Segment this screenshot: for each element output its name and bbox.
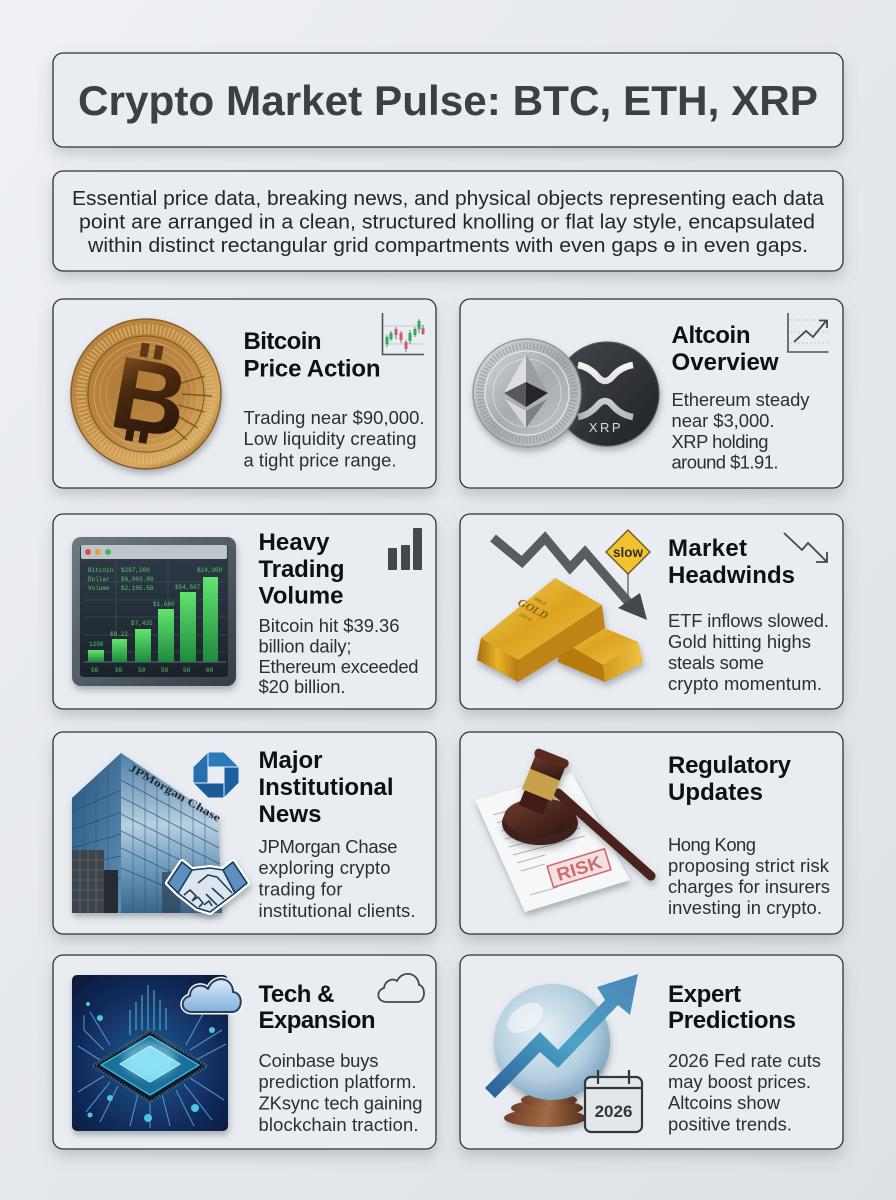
icon: trading monitor: 50 bbox=[161, 667, 169, 674]
icon: slow sign: slow bbox=[613, 545, 643, 560]
body text: proposing strict risk bbox=[668, 855, 830, 876]
icon: bars bbox=[388, 528, 422, 570]
panel: Regulatory Updates bbox=[460, 732, 843, 934]
body text: near $3,000. bbox=[672, 410, 774, 431]
panel: Altcoin Overview bbox=[460, 299, 843, 488]
heading: Trading bbox=[258, 556, 344, 583]
body text: Ethereum steady bbox=[672, 389, 810, 410]
heading: Price Action bbox=[244, 356, 380, 382]
icon: trading monitor: 50 bbox=[91, 667, 99, 674]
arrow: falling trend bbox=[493, 538, 647, 620]
icon: rising line chart bbox=[788, 313, 828, 352]
icon: candlestick chart bbox=[382, 313, 424, 354]
icon: document bbox=[475, 773, 630, 912]
icon: trading monitor: 1200 bbox=[89, 641, 104, 648]
heading bbox=[668, 981, 796, 1034]
stamp: RISK: RISK bbox=[554, 852, 604, 885]
body text: Ethereum exceeded bbox=[258, 656, 418, 677]
heading: Tech & bbox=[258, 981, 334, 1008]
icon: trading monitor: $1,680 bbox=[153, 601, 175, 608]
icon: crystal ball bbox=[494, 984, 610, 1127]
icon: bitcoin coin bbox=[71, 319, 221, 469]
icon: trading monitor: $2,105.50 bbox=[121, 585, 154, 592]
body text: around $1.91. bbox=[672, 452, 778, 472]
body text: Altcoins show bbox=[668, 1092, 781, 1113]
arrow: rising trend bbox=[485, 974, 638, 1098]
icon: JPMorgan building: JPMorgan Chase bbox=[126, 762, 223, 825]
body text: a tight price range. bbox=[244, 450, 396, 470]
heading: Updates bbox=[668, 779, 763, 806]
heading bbox=[258, 981, 376, 1034]
icon: falling line bbox=[784, 533, 827, 562]
body text: charges for insurers bbox=[668, 876, 830, 897]
body text: steals some bbox=[668, 652, 764, 673]
body text: Bitcoin hit $39.36 bbox=[258, 615, 400, 636]
stamp: RISK bbox=[547, 849, 611, 887]
icon: Chase logo bbox=[193, 752, 239, 798]
body text: Trading near $90,000. bbox=[244, 407, 424, 428]
heading: Market bbox=[668, 535, 747, 562]
icon: circuit chip image bbox=[72, 975, 228, 1131]
icon: trading monitor: 50 bbox=[115, 667, 123, 674]
panel: Heavy Trading Volume bbox=[53, 514, 436, 709]
intro text: within distinct rectangular grid compartments with even gaps ө in even gaps. bbox=[87, 234, 808, 257]
heading: Major bbox=[258, 747, 322, 774]
heading: Heavy bbox=[258, 529, 330, 556]
heading: Headwinds bbox=[668, 562, 795, 589]
body text: Gold hitting highs bbox=[668, 631, 811, 652]
body text: positive trends. bbox=[668, 1114, 792, 1134]
body text: Low liquidity creating bbox=[244, 428, 416, 449]
body text: Coinbase buys bbox=[258, 1050, 378, 1071]
icon: gold bars: 100 G bbox=[517, 612, 533, 623]
heading: Expansion bbox=[258, 1007, 376, 1034]
panel: Expert Predictions bbox=[460, 955, 843, 1149]
intro text: Essential price data, breaking news, and physical objects representing each data bbox=[72, 187, 825, 210]
body text: XRP holding bbox=[672, 431, 768, 452]
body text: JPMorgan Chase bbox=[258, 836, 398, 857]
heading: Altcoin bbox=[672, 322, 750, 349]
heading: Volume bbox=[258, 582, 344, 610]
heading: Institutional bbox=[258, 774, 394, 801]
panel: Tech & Expansion bbox=[53, 955, 436, 1149]
body text: ETF inflows slowed. bbox=[668, 610, 829, 631]
panel: Bitcoin Price Action bbox=[53, 299, 436, 488]
heading bbox=[244, 328, 380, 382]
icon: 2026 calendar: 2026 bbox=[595, 1102, 632, 1121]
icon: cloud outline bbox=[378, 974, 424, 1002]
intro text bbox=[72, 187, 825, 257]
panel: Major Institutional News bbox=[53, 732, 436, 934]
body text: investing in crypto. bbox=[668, 897, 822, 918]
icon: trading monitor: $24,300 bbox=[197, 567, 223, 574]
heading bbox=[258, 529, 344, 610]
body text: billion daily; bbox=[258, 636, 352, 656]
icon: trading monitor: 50 bbox=[183, 667, 191, 674]
heading: Predictions bbox=[668, 1007, 796, 1034]
body text bbox=[668, 610, 829, 694]
heading: Regulatory bbox=[668, 752, 792, 779]
icon: trading monitor: $6,003.80 bbox=[121, 576, 154, 583]
icon: trading monitor: Dollar bbox=[88, 576, 110, 583]
heading bbox=[672, 322, 779, 376]
icon: blue cloud bbox=[183, 979, 241, 1012]
icon: trading monitor: 60 bbox=[206, 667, 214, 674]
icon: gold bars: GOLD bbox=[514, 597, 551, 621]
icon: bitcoin coin: B bbox=[103, 334, 196, 460]
body text: trading for bbox=[258, 878, 342, 900]
body text bbox=[672, 389, 810, 472]
icon: gold bars bbox=[477, 578, 643, 682]
body text bbox=[668, 834, 830, 918]
heading: Expert bbox=[668, 981, 741, 1008]
intro text: point are arranged in a clean, structured knolling or flat lay style, encapsulated bbox=[79, 210, 815, 234]
body text: exploring crypto bbox=[258, 857, 390, 878]
icon: XRP coin bbox=[555, 342, 659, 446]
icon: gavel bbox=[502, 747, 651, 876]
body text: prediction platform. bbox=[258, 1071, 416, 1092]
heading: Bitcoin bbox=[244, 328, 322, 355]
icon: 2026 calendar bbox=[585, 1070, 642, 1132]
body text: crypto momentum. bbox=[668, 673, 822, 694]
title panel bbox=[53, 53, 843, 147]
body text bbox=[668, 1050, 821, 1134]
icon: trading monitor: 50 bbox=[138, 667, 146, 674]
intro panel bbox=[53, 171, 843, 271]
icon: JPMorgan building bbox=[72, 753, 223, 913]
body text: ZKsync tech gaining bbox=[258, 1092, 422, 1114]
icon: trading monitor: Volume bbox=[88, 585, 110, 592]
heading bbox=[668, 752, 792, 806]
heading: Overview bbox=[672, 349, 779, 376]
title: Crypto Market Pulse: BTC, ETH, XRP bbox=[78, 77, 818, 124]
heading bbox=[258, 747, 394, 828]
icon: trading monitor bbox=[72, 537, 236, 686]
icon: Ethereum coin bbox=[473, 339, 581, 447]
icon: trading monitor: $54,507 bbox=[175, 584, 201, 591]
body text bbox=[244, 407, 424, 470]
icon: XRP coin: XRP bbox=[589, 420, 623, 435]
body text bbox=[258, 836, 416, 921]
icon: slow sign bbox=[606, 530, 650, 606]
body text: institutional clients. bbox=[258, 900, 416, 921]
body text: $20 billion. bbox=[258, 676, 346, 697]
icon: handshake bbox=[168, 862, 247, 912]
body text: blockchain traction. bbox=[258, 1114, 418, 1135]
icon: trading monitor: $297,260 bbox=[121, 567, 150, 574]
body text bbox=[258, 1050, 422, 1135]
body text: Hong Kong bbox=[668, 834, 756, 855]
icon: trading monitor: $8.22 bbox=[110, 631, 128, 638]
icon: gold bars: 999.9 bbox=[532, 596, 547, 607]
body text bbox=[258, 615, 418, 697]
body text: may boost prices. bbox=[668, 1071, 811, 1092]
body text: 2026 Fed rate cuts bbox=[668, 1050, 821, 1071]
heading: News bbox=[258, 801, 322, 828]
heading bbox=[668, 535, 795, 589]
panel: Market Headwinds bbox=[460, 514, 843, 709]
icon: trading monitor: Bitcoin bbox=[88, 567, 114, 574]
icon: trading monitor: $7,435 bbox=[131, 620, 153, 627]
